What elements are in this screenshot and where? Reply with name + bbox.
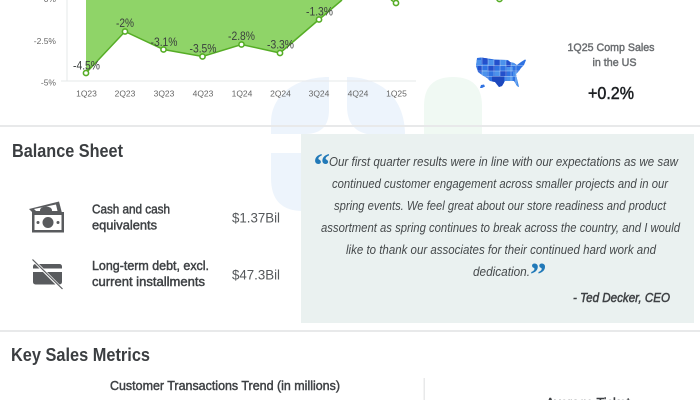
- y axis labels: -2.5%: [34, 36, 56, 46]
- data labels: -1.3%: [306, 6, 333, 18]
- comp sales line chart: [34, 0, 502, 98]
- heading: key sales metrics: Key Sales Metrics: [11, 344, 150, 365]
- cash value: $1.37Bil: [232, 210, 280, 226]
- debt label: [92, 259, 209, 289]
- quote attribution: - Ted Decker, CEO: [573, 290, 670, 305]
- area fill: [86, 0, 342, 73]
- heading: balance sheet: Balance Sheet: [12, 140, 123, 161]
- stat caption: 1Q25 Comp Sales: [568, 42, 655, 54]
- data labels: -3.1%: [150, 37, 178, 49]
- icon: crossed-out credit card: [32, 260, 62, 289]
- stat caption: in the US: [592, 57, 636, 69]
- background watermark logo: [271, 77, 482, 211]
- x axis labels: 4Q23: [193, 88, 214, 98]
- debt label: Long-term debt, excl.: [92, 259, 209, 273]
- data labels: -2%: [116, 18, 134, 30]
- opening quote mark: “: [314, 148, 330, 184]
- x axis labels: 4Q24: [348, 88, 369, 98]
- quote text: [321, 154, 681, 279]
- cash label: [92, 202, 170, 232]
- x axis labels: 2Q24: [270, 88, 291, 98]
- data labels: [73, 6, 333, 72]
- icon: cash: [29, 202, 64, 232]
- cash label: equivalents: [92, 218, 157, 232]
- x axis labels: 3Q23: [154, 88, 175, 98]
- debt value: $47.3Bil: [232, 268, 280, 282]
- stat caption: [568, 42, 655, 69]
- x axis labels: 3Q24: [309, 88, 330, 98]
- x axis labels: [76, 88, 407, 98]
- data labels: -4.5%: [73, 60, 100, 72]
- data labels: -3.3%: [267, 40, 294, 52]
- section divider: [0, 125, 700, 127]
- stat value: +0.2%: [588, 83, 634, 103]
- trend line: [86, 0, 396, 73]
- data point markers: [83, 0, 502, 76]
- customer transactions chart title: Customer Transactions Trend (in millions): [110, 378, 340, 393]
- closing quote mark: ”: [530, 257, 546, 293]
- panel: CEO quote: [301, 134, 694, 323]
- x axis labels: 1Q24: [232, 88, 253, 98]
- section divider: [0, 330, 700, 332]
- y axis labels: [34, 0, 56, 88]
- data labels: -3.5%: [190, 44, 216, 56]
- cash label: Cash and cash: [92, 202, 170, 216]
- icon: US map: [476, 58, 526, 88]
- y axis labels: -5%: [41, 78, 56, 88]
- chart axes: [61, 0, 416, 81]
- x axis labels: 1Q25: [386, 88, 407, 98]
- vertical divider: [424, 378, 425, 400]
- quote text: dedication.: [473, 264, 530, 279]
- debt label: current installments: [92, 275, 205, 289]
- x axis labels: 2Q23: [115, 88, 136, 98]
- x axis labels: 1Q23: [76, 88, 97, 98]
- comp sales stat: [568, 42, 655, 103]
- quote text: like to thank our associates for their continued hard work and: [346, 242, 657, 257]
- data labels: -2.8%: [228, 31, 255, 43]
